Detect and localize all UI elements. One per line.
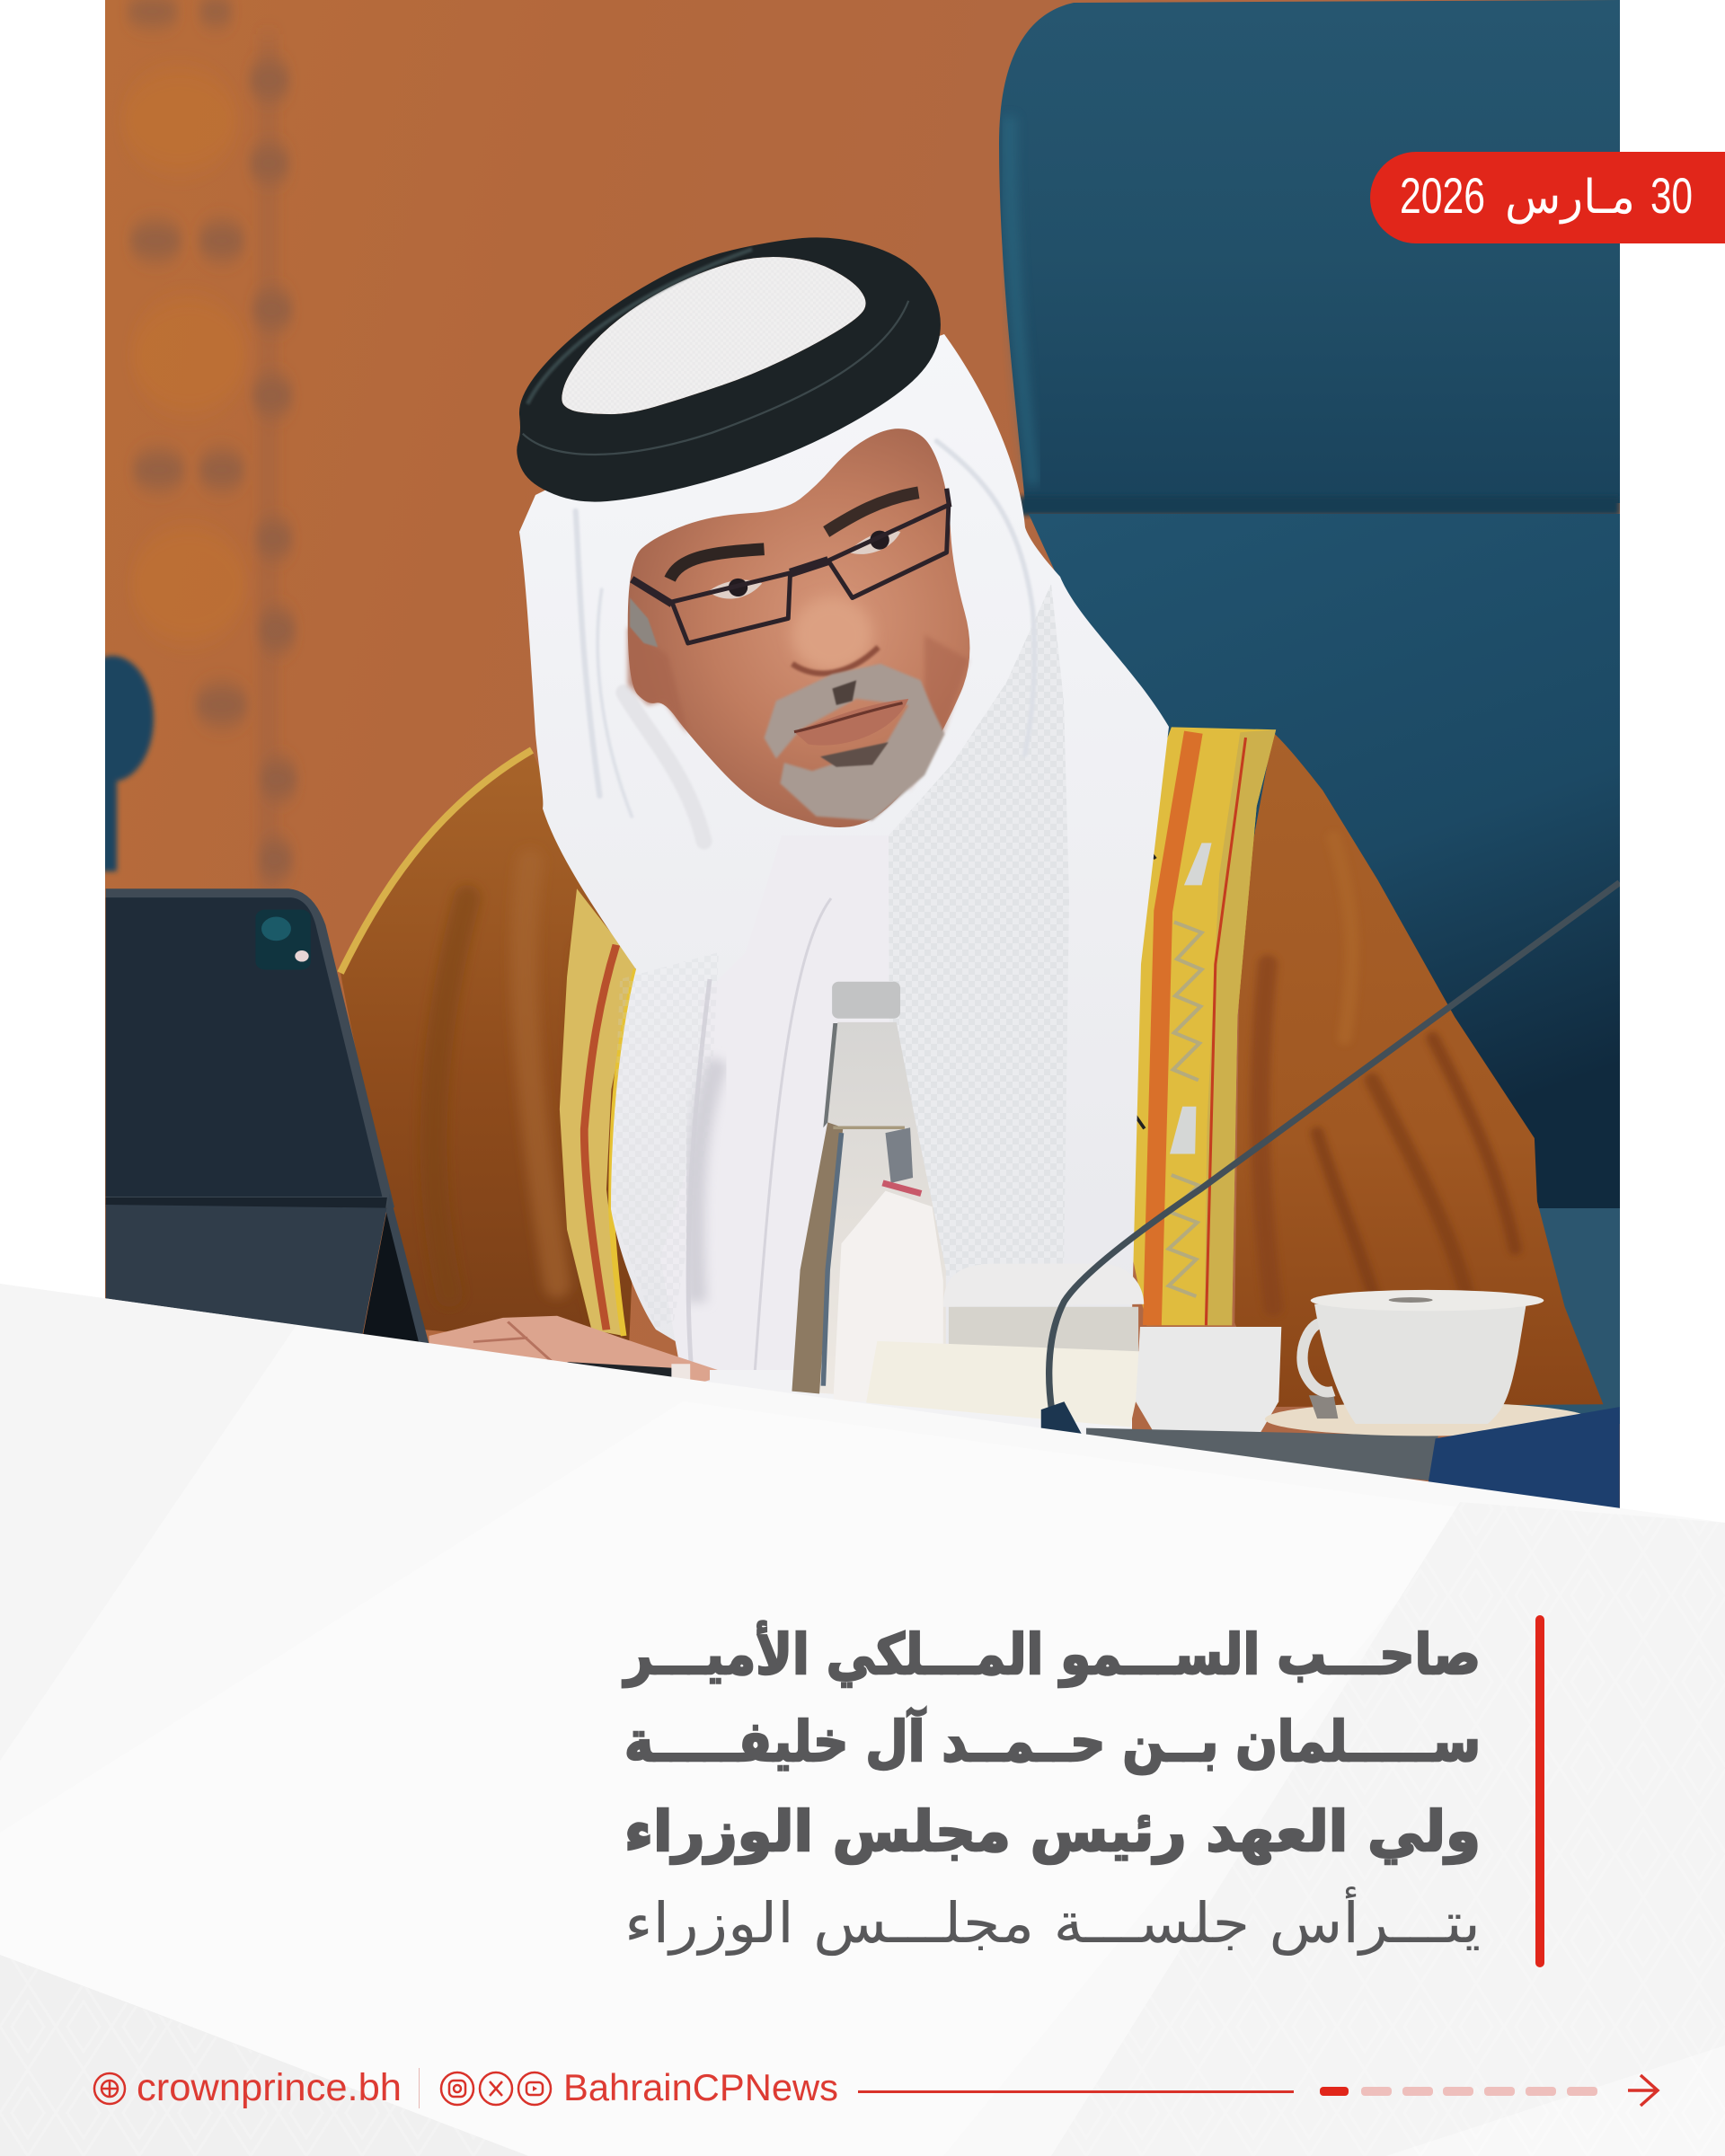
headline line 4: يتـــرأس جلســـة مجلـــس الوزراء — [624, 1886, 1481, 1956]
shawl left panel texture — [615, 977, 633, 1106]
glasses — [632, 489, 950, 643]
facet: left middle — [0, 1401, 1473, 2156]
left robe sleeve — [341, 750, 647, 1348]
right jaw shadow — [908, 635, 969, 791]
white cap — [562, 257, 866, 414]
place card — [866, 1341, 1146, 1427]
cup large — [1302, 1290, 1544, 1424]
right gold trim — [1133, 727, 1276, 1325]
eye right — [848, 531, 900, 554]
table objects — [792, 882, 1620, 1523]
stand edge — [386, 1194, 429, 1344]
hand — [429, 1316, 730, 1386]
chair seat seam — [1020, 496, 1620, 516]
glass with cover — [943, 1264, 1144, 1355]
chair back — [999, 0, 1620, 503]
red vertical accent bar — [1535, 1615, 1544, 1967]
chair back highlight — [1010, 117, 1033, 485]
thobe centre — [676, 1340, 723, 1382]
date text: 2026 — [1400, 167, 1485, 224]
wall: orange wood panel — [105, 0, 1620, 1527]
footer line — [858, 2090, 1294, 2093]
headline text — [622, 1621, 1481, 1956]
keyboard cover — [106, 1204, 387, 1335]
arrow — [1628, 2075, 1658, 2106]
facet: bottom left — [0, 1955, 528, 2156]
chair lower cushion — [1029, 514, 1620, 1213]
icon: globe — [94, 2073, 125, 2104]
tablet back — [106, 888, 394, 1207]
lips — [794, 699, 908, 746]
nose highlight — [792, 597, 872, 672]
headline line 2: ســـــلمان بــن حــمــد آل خليفـــــة — [624, 1707, 1481, 1774]
tablet — [106, 888, 730, 1386]
goatee — [820, 742, 889, 767]
white table surface — [710, 1370, 1132, 1473]
footer bar — [94, 2066, 1658, 2109]
chair bottom cushion — [1517, 1208, 1620, 1424]
website text: crownprince.bh — [137, 2066, 402, 2109]
right robe sleeve — [1234, 732, 1603, 1407]
nostril shadow — [792, 648, 879, 674]
badge shape — [1370, 152, 1725, 243]
agal: black double ring and cap — [517, 237, 941, 502]
temple hair — [630, 597, 658, 648]
eye left — [708, 580, 762, 599]
handle text: BahrainCPNews — [563, 2066, 838, 2108]
left robe folds — [424, 857, 572, 1299]
moustache and beard — [765, 664, 944, 820]
left gold trim — [560, 888, 636, 1336]
left cheek shadow — [628, 627, 688, 734]
camera bump — [255, 909, 311, 969]
tablet stand triangle — [362, 1209, 424, 1346]
date text: 30 — [1650, 167, 1693, 224]
date text — [1400, 167, 1693, 225]
facet: right — [1051, 1502, 1725, 2156]
dark pad on table — [567, 1362, 673, 1378]
right robe folds — [1249, 954, 1522, 1311]
icon: youtube — [518, 2072, 551, 2105]
facet: bottom right — [1386, 2046, 1725, 2156]
face — [628, 429, 969, 827]
left robe gold piping — [341, 750, 532, 973]
wall ornament: blurred lattice — [123, 0, 298, 894]
date text: مـارس — [1505, 171, 1635, 225]
facet: top left — [0, 1284, 296, 1761]
eyebrows — [670, 549, 765, 579]
lattice pattern — [1051, 1502, 1725, 2156]
blue folder — [1421, 1407, 1620, 1523]
headline line 3: ولي العهد رئيس مجلس الوزراء — [624, 1798, 1481, 1864]
ghutra soft folds — [576, 441, 1034, 841]
thobe placket folds — [688, 898, 831, 1374]
icon: instagram — [441, 2072, 473, 2105]
microphone arm — [1049, 882, 1620, 1412]
headline line 1: صاحـــب الســـمو المـــلكي الأميـــر — [622, 1621, 1481, 1687]
panel base — [0, 1284, 1725, 2156]
white lower panel with faceted background — [0, 1284, 1725, 2156]
table dark surface — [1086, 1428, 1438, 1480]
photo: crown prince at cabinet table — [71, 0, 1620, 1527]
rings — [517, 237, 941, 502]
small chair, blurred, far left — [105, 652, 158, 875]
spoon — [1309, 1395, 1338, 1418]
cup small — [1136, 1327, 1281, 1435]
page dashes — [1320, 2087, 1597, 2096]
water bottle — [792, 982, 946, 1401]
white ghutra headdress and shawl — [519, 334, 1169, 1383]
shawl right panel with houndstooth texture — [889, 584, 1069, 1276]
footer divider — [419, 2068, 420, 2108]
skin — [628, 429, 969, 827]
saucer — [1265, 1402, 1589, 1436]
date badge — [1370, 152, 1725, 243]
icon: X — [480, 2072, 512, 2105]
